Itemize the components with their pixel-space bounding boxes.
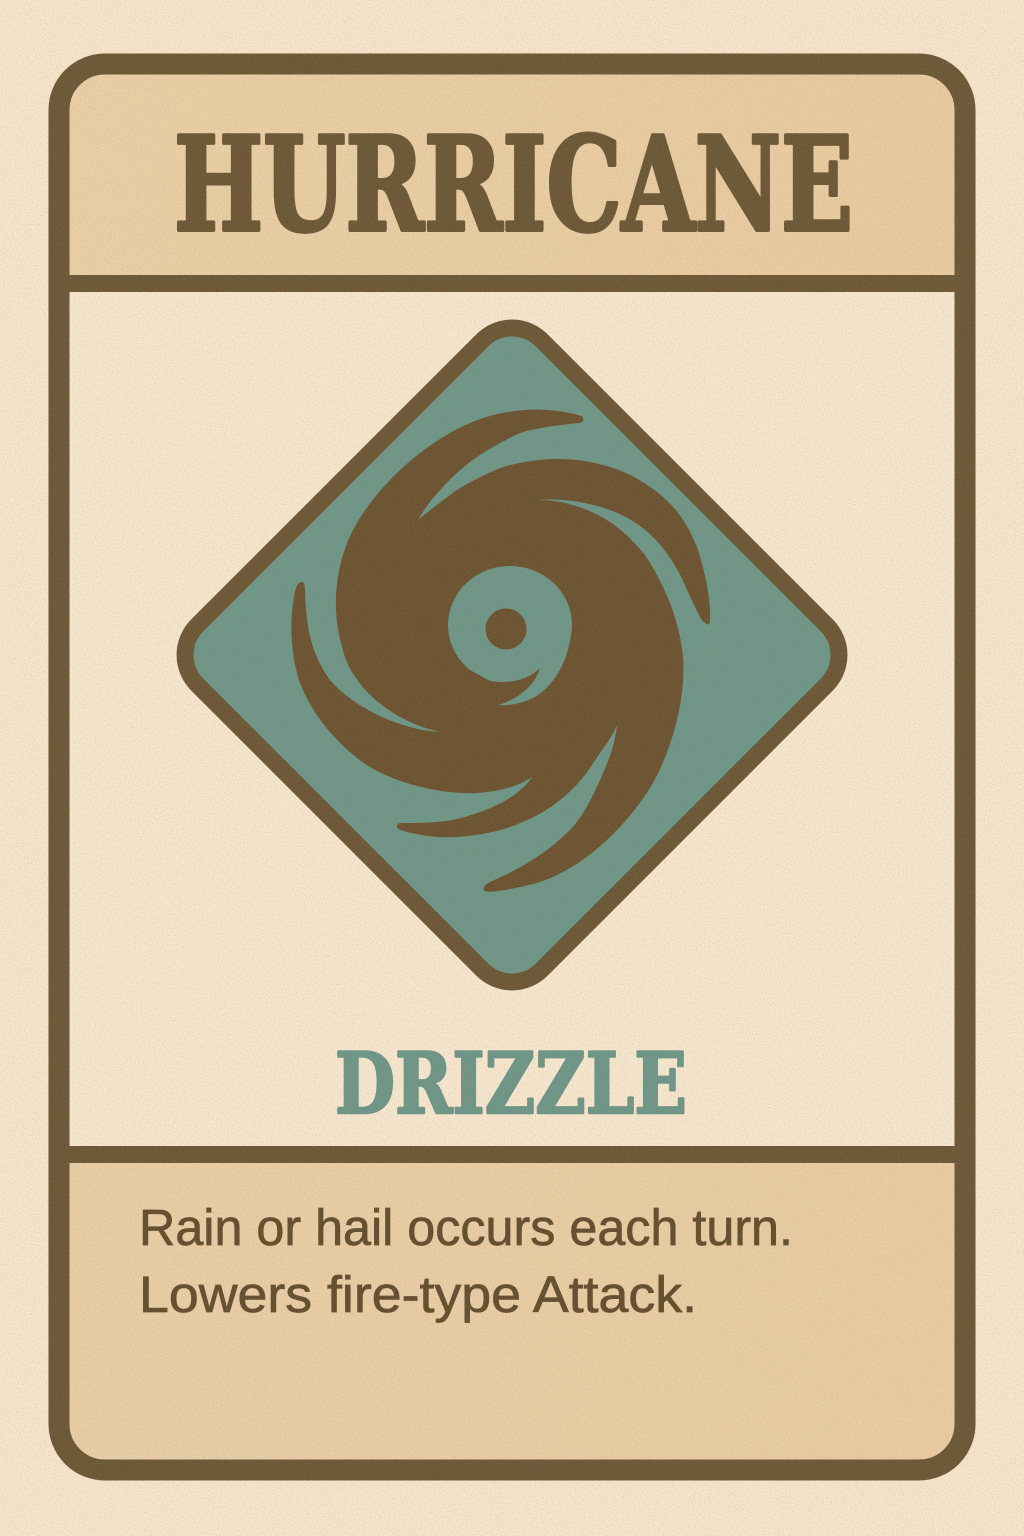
footer divider bbox=[59, 1146, 965, 1163]
eye tail bbox=[498, 640, 570, 705]
diamond badge bbox=[168, 311, 856, 999]
line two: Lowers fire-type Attack. bbox=[139, 1266, 697, 1323]
eye ring bbox=[448, 566, 572, 684]
panel: header band bbox=[70, 74, 954, 275]
hurricane eye bbox=[448, 566, 572, 705]
subtitle: DRIZZLE bbox=[335, 1034, 687, 1133]
line one: Rain or hail occurs each turn. bbox=[139, 1199, 793, 1256]
eye sliver bbox=[470, 668, 540, 705]
panel: footer band bbox=[59, 1155, 965, 1470]
effect description bbox=[139, 1199, 793, 1323]
hurricane swirl bbox=[291, 410, 710, 892]
eye centre dot bbox=[486, 608, 526, 650]
icon: hurricane diamond bbox=[168, 311, 856, 999]
header divider bbox=[59, 275, 965, 292]
